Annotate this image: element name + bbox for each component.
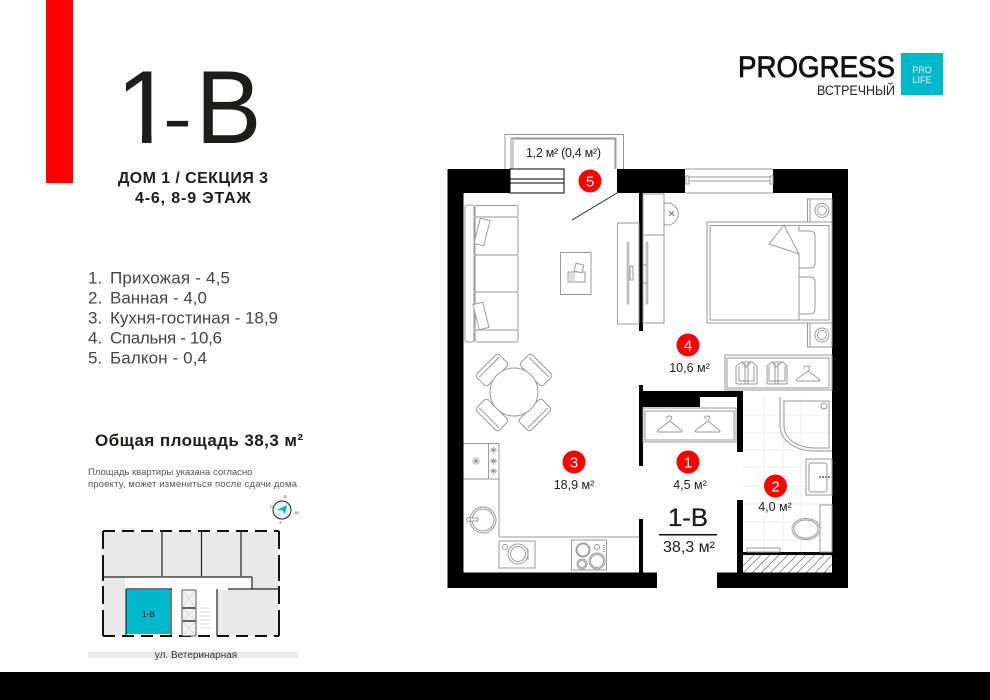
room 3 label: 18,9 м² [554,478,594,492]
room list: Балкон - 0,4 [110,348,207,368]
compass [270,494,299,525]
cooktop [572,540,606,570]
logo [738,51,943,98]
tile grid [743,397,832,552]
compass: З [279,520,282,525]
room 4 label [669,334,710,375]
room list: Прихожая - 4,5 [110,268,230,288]
room list: 2. [88,288,102,308]
wardrobe with clothes [725,355,832,390]
apartment stamp: 38,3 м² [663,539,715,556]
washing machine [499,541,535,568]
logo: PRO [912,65,932,75]
street name [88,650,298,661]
walls [448,169,848,588]
title: apartment type: 1 [116,50,174,166]
washbasket [747,548,780,552]
floor plan [448,134,848,588]
title: apartment type: - [163,79,192,159]
elevator core [182,590,210,636]
red accent bar [46,0,73,183]
tv unit [618,194,664,324]
bottom black band [0,672,990,700]
apartment stamp [659,504,717,556]
room 2 label: 4,0 м² [758,500,792,514]
room list: 1. [88,268,102,288]
room list: Кухня-гостиная - 18,9 [110,308,278,328]
hatched shaft [743,555,832,573]
logo: ВСТРЕЧНЫЙ [817,83,895,98]
balcony label: 1,2 м² (0,4 м²) [526,146,601,160]
room list: 4. [88,328,102,348]
room 4 label: 10,6 м² [669,361,710,375]
room list: 3. [88,308,102,328]
dining table with chairs [475,353,553,432]
street name: ул. Ветеринарная [155,650,237,661]
balcony [505,134,624,193]
disclaimer note: Площадь квартиры указана согласно [88,467,252,478]
room 1 label: 1 [684,454,692,472]
grey rooms [104,532,278,636]
room 1 label: 4,5 м² [673,478,707,492]
kitchen sink [466,507,496,533]
room 2 label: 2 [771,478,780,496]
disclaimer note: проекту, может измениться после сдачи дома [88,479,298,490]
sofa [465,205,518,342]
heading: building and floors [118,170,268,207]
room 3 label: 3 [570,454,578,472]
coffee table [560,252,591,294]
title: apartment type: B [196,50,262,166]
kitchen counter [464,444,639,537]
heading: building and floors: ДОМ 1 / СЕКЦИЯ 3 [118,170,268,187]
room list: Ванная - 4,0 [110,288,207,308]
floor lamp [664,203,678,225]
compass: В [284,494,287,499]
room list: 5. [88,348,102,368]
shower [780,397,832,451]
key plan [103,531,279,636]
highlighted apartment: 1-B [142,610,155,619]
marker 5: 5 [586,174,594,190]
compass: Ю [295,510,299,515]
highlighted apartment [126,590,170,634]
heading: building and floors: 4-6, 8-9 ЭТАЖ [135,190,252,207]
key plan walls [103,531,279,636]
balcony door [572,193,617,220]
room 2 label [758,474,792,514]
bedroom window [685,169,773,193]
compass: С [270,504,273,509]
hallway closet [643,408,736,442]
room list: Спальня - 10,6 [110,328,222,348]
bed [707,222,832,323]
room 3 label [554,450,594,492]
disclaimer note [88,467,298,490]
bathroom sink [806,459,832,495]
marker 5 [578,170,602,192]
room 4 label: 4 [684,338,692,354]
toilet [792,505,832,552]
logo: PROGRESS [738,51,895,84]
logo: LIFE [912,75,932,85]
title: apartment type [110,50,262,166]
apartment stamp: 1-B [668,504,708,532]
room list [88,268,278,368]
room 1 label [673,450,707,492]
total area: Общая площадь 38,3 м² [95,431,303,450]
bedside tables [808,199,832,347]
